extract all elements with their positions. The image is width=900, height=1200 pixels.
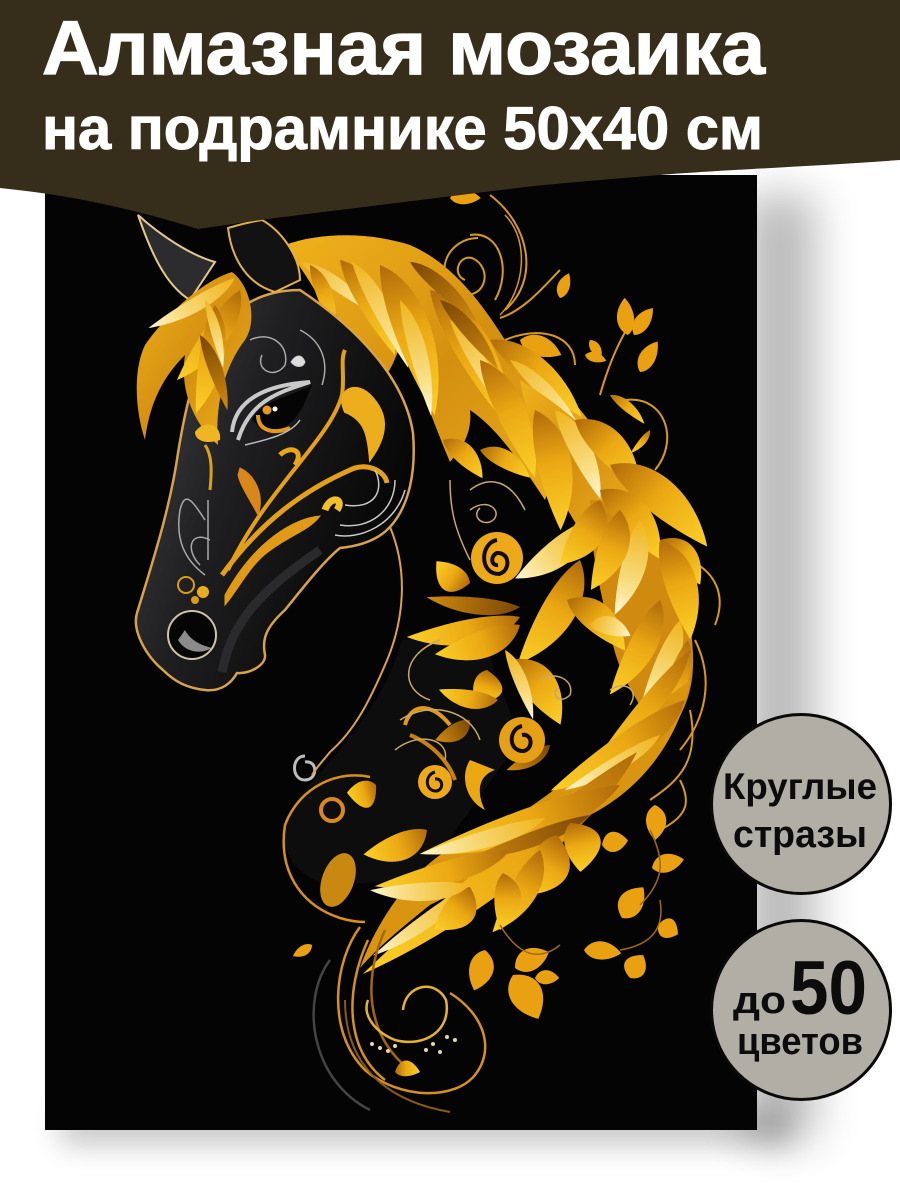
head ornaments bbox=[178, 330, 405, 605]
horse body bbox=[285, 630, 520, 885]
neck outline bbox=[312, 527, 402, 775]
fine details in the mane bbox=[395, 480, 633, 760]
mane: long lower sweep bbox=[357, 646, 701, 993]
bottom leaves and dots bbox=[291, 941, 457, 1076]
title line 1: Алмазная мозаика bbox=[42, 6, 766, 91]
title line 2: на подрамнике 50х40 см bbox=[42, 95, 763, 162]
badge: up to 50 colours: до bbox=[733, 980, 786, 1022]
right ear bbox=[228, 220, 300, 292]
arc around lower body bbox=[284, 775, 370, 922]
badge: round rhinestones: Круглые bbox=[723, 766, 877, 807]
badge: round rhinestones: стразы bbox=[733, 814, 867, 856]
leaf stems bbox=[500, 830, 661, 954]
black canvas bbox=[45, 175, 757, 1130]
mane: flowing right feathers bbox=[510, 380, 724, 745]
banner background bbox=[0, 0, 900, 229]
left mane branches bbox=[406, 555, 580, 750]
top swirl ornaments bbox=[444, 195, 720, 830]
badge: round rhinestones bbox=[712, 714, 890, 894]
spiral ornaments bbox=[294, 532, 545, 912]
canvas bottom shadow bbox=[60, 1110, 790, 1145]
mane: upper mass bbox=[285, 235, 602, 500]
leaves upper right bbox=[517, 271, 664, 456]
bottom curls bbox=[314, 927, 485, 1112]
badge: up to 50 colours bbox=[712, 920, 890, 1100]
badge: up to 50 colours: цветов bbox=[737, 1021, 863, 1063]
mouth highlight bbox=[222, 550, 320, 672]
badge: up to 50 colours: 50 bbox=[790, 946, 867, 1031]
horse nostril bbox=[168, 611, 216, 659]
banner bbox=[0, 0, 900, 229]
horse head bbox=[136, 290, 414, 690]
horse eye bbox=[232, 382, 312, 445]
scattered leaves bbox=[464, 805, 686, 1026]
top leaf bbox=[450, 190, 481, 204]
forelock bbox=[137, 272, 255, 445]
left ear bbox=[138, 215, 215, 300]
canvas shadow bbox=[745, 195, 815, 1140]
canvas picture bbox=[45, 175, 757, 1130]
